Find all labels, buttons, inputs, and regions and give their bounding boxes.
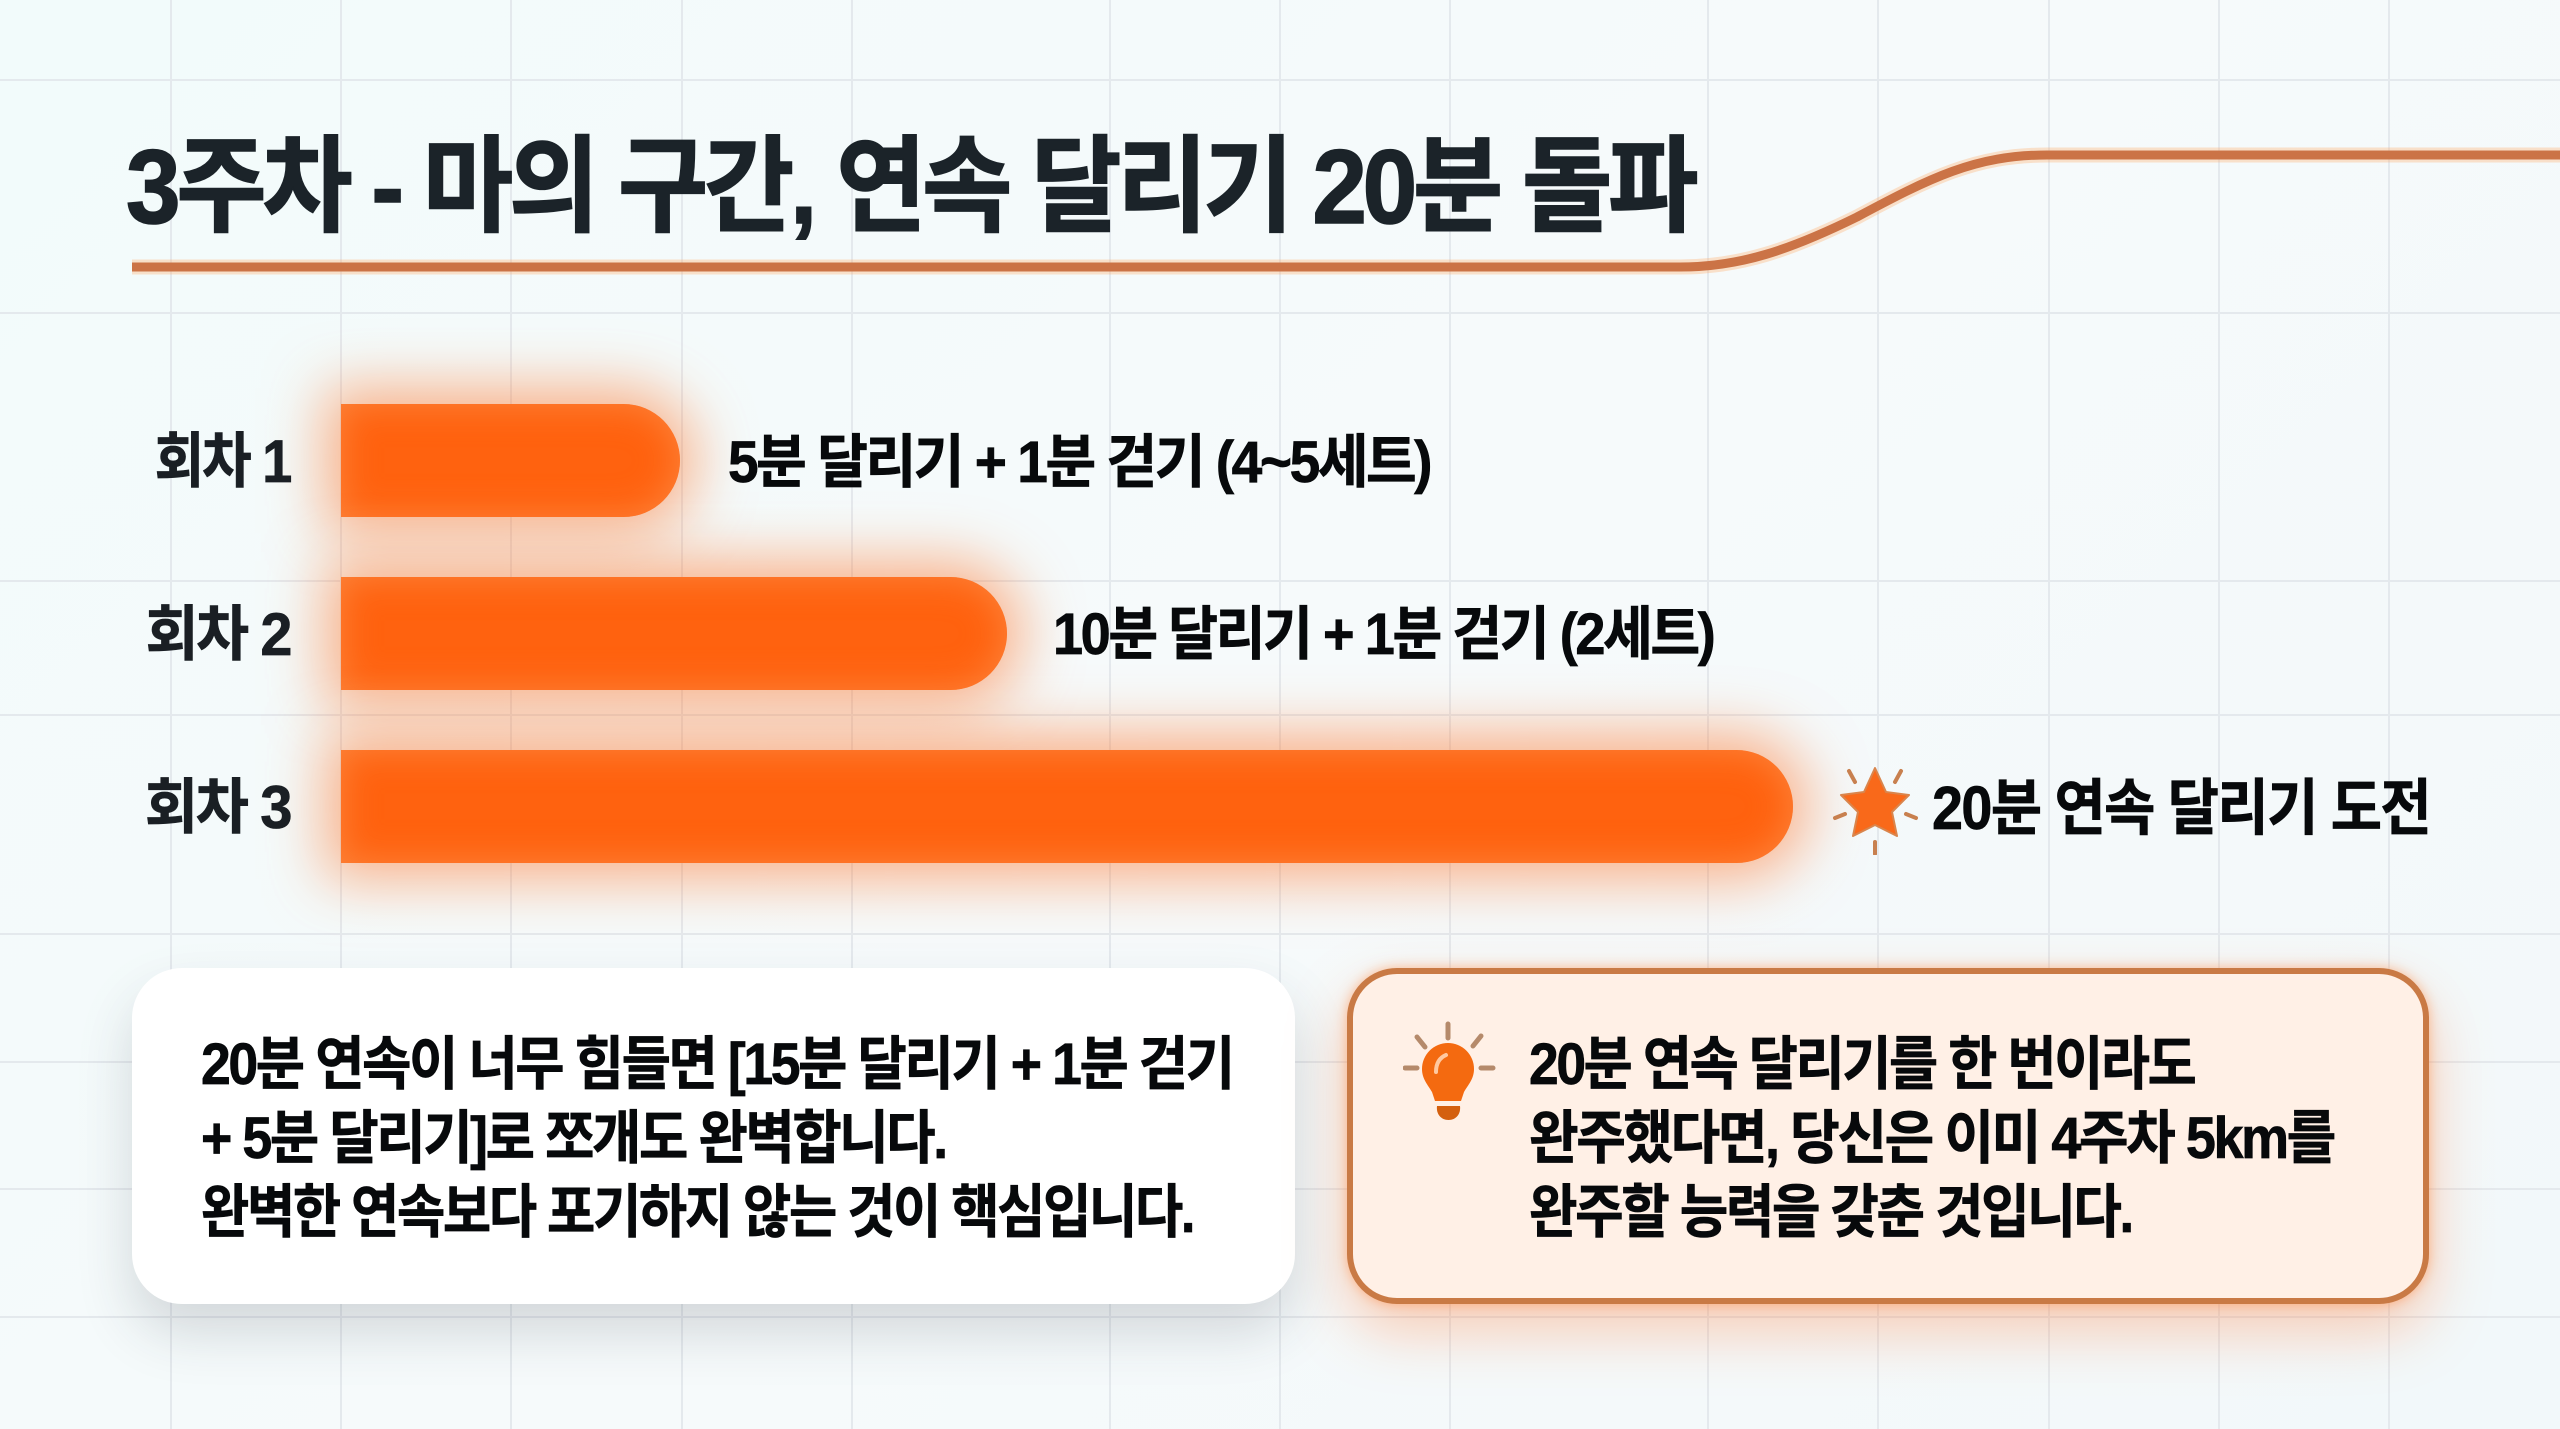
bar: session 2 [341,577,1007,690]
bar: session 3 [341,750,1793,863]
description: session 3: 20분 연속 달리기 도전 [1932,774,2430,842]
label: session 3: 회차 3 [145,774,290,841]
label: session 2: 회차 2 [146,601,290,668]
title underline rising curve [132,148,2560,274]
description: session 1: 5분 달리기 + 1분 걷기 (4~5세트) [728,430,1430,495]
icon: light bulb [1403,1022,1496,1120]
label: session 1: 회차 1 [155,428,290,495]
card text: encouragement [1529,1032,2334,1245]
card: advice [132,968,1295,1304]
card: encouragement [1347,968,2429,1304]
card text: encouragement: 완주했다면, 당신은 이미 4주차 5km를 [1529,1106,2334,1171]
icon: star burst [1832,767,1918,855]
description: session 2: 10분 달리기 + 1분 걷기 (2세트) [1053,602,1713,667]
card text: advice: 완벽한 연속보다 포기하지 않는 것이 핵심입니다. [201,1180,1193,1245]
card text: encouragement: 20분 연속 달리기를 한 번이라도 [1529,1032,2194,1097]
title: 3주차 - 마의 구간, 연속 달리기 20분 돌파 [126,129,1694,246]
bar: session 1 [341,404,680,517]
card text: advice: + 5분 달리기]로 쪼개도 완벽합니다. [201,1106,946,1171]
card text: encouragement: 완주할 능력을 갖춘 것입니다. [1529,1180,2132,1245]
card text: advice: 20분 연속이 너무 힘들면 [15분 달리기 + 1분 걷기 [201,1032,1233,1097]
card text: advice [201,1032,1233,1245]
